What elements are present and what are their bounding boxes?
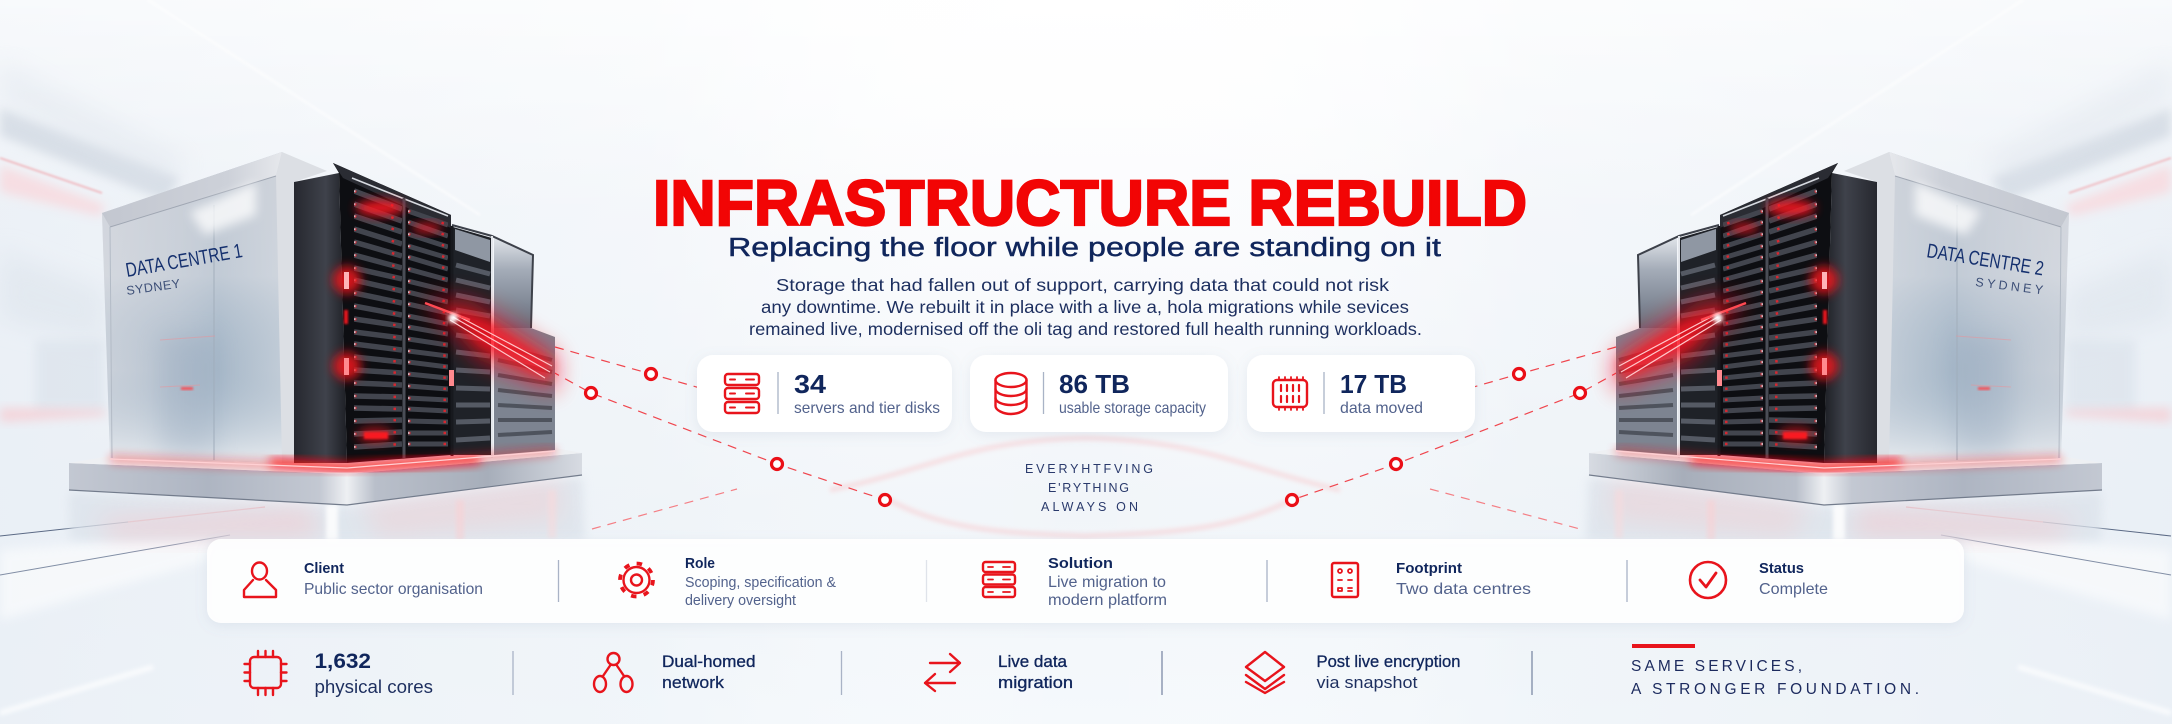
subtitle: Replacing the floor while people are standing on it <box>728 234 1441 262</box>
stat card: data moved: data moved <box>1340 400 1423 417</box>
bottom row: encryption: Post live encryption <box>1316 653 1460 671</box>
data centre 1 label: SYDNEY <box>125 277 182 298</box>
stat card: data moved <box>1247 355 1475 432</box>
everything always on tagline: E'RYTHING <box>1048 481 1129 495</box>
bottom row: encryption <box>1246 652 1460 693</box>
stat card: storage: usable storage capacity <box>1059 400 1206 417</box>
icon: processor <box>244 651 286 695</box>
icon: transfer arrows <box>925 654 960 691</box>
icon: check <box>1690 562 1726 598</box>
central glow arcs <box>830 438 1340 536</box>
bottom row: physical cores: 1,632 <box>314 650 371 673</box>
role: Scoping, specification & <box>685 575 836 591</box>
stat card: servers: servers and tier disks <box>794 400 940 417</box>
role <box>620 555 836 609</box>
stat card: servers: 34 <box>794 369 827 399</box>
bottom row: live migration <box>925 652 1073 692</box>
footprint: Two data centres <box>1396 581 1531 598</box>
bottom row: network <box>594 652 756 692</box>
everything always on tagline <box>1025 462 1153 514</box>
title: INFRASTRUCTURE REBUILD <box>653 167 1527 239</box>
bottom row: live migration: migration <box>998 673 1073 692</box>
stat card: servers <box>697 355 952 432</box>
solution: modern platform <box>1048 592 1167 609</box>
bottom row: physical cores: physical cores <box>314 676 433 697</box>
bottom row: encryption: via snapshot <box>1316 673 1418 692</box>
left dashed connection lines <box>453 317 885 529</box>
footprint: Footprint <box>1396 560 1462 577</box>
data centre 2 label: SYDNEY <box>1975 275 2044 297</box>
icon: person <box>244 562 276 597</box>
closing statement: A STRONGER FOUNDATION. <box>1631 681 1919 698</box>
icon: floor plan <box>1332 563 1358 597</box>
bottom row: physical cores <box>244 650 433 697</box>
icon: layers <box>1246 652 1284 693</box>
closing statement: SAME SERVICES, <box>1631 658 1802 675</box>
client: Client <box>304 560 344 577</box>
data centre 2 illustration <box>1586 152 2102 541</box>
right dashed connection lines <box>1292 317 1718 529</box>
client <box>244 560 483 598</box>
icon: server stack <box>725 374 759 413</box>
footprint <box>1332 560 1531 598</box>
data centre 2 label: DATA CENTRE 2 <box>1925 240 2045 280</box>
solution <box>983 555 1167 609</box>
bottom row: network: Dual-homed <box>662 652 756 671</box>
everything always on tagline: ALWAYS ON <box>1041 500 1138 514</box>
icon: network nodes <box>594 653 632 692</box>
solution: Live migration to <box>1048 574 1166 591</box>
intro paragraph <box>749 275 1422 339</box>
stat card: storage: 86 TB <box>1059 369 1130 399</box>
icon: servers <box>983 562 1015 597</box>
intro paragraph: Storage that had fallen out of support, carrying data that could not risk <box>776 275 1389 295</box>
role: Role <box>685 555 715 572</box>
data centre 1 label <box>124 240 244 298</box>
status: Status <box>1759 560 1804 577</box>
bottom row: network: network <box>662 673 725 692</box>
data centre 1 label: DATA CENTRE 1 <box>124 240 244 282</box>
stat card: data moved: 17 TB <box>1340 369 1407 399</box>
solution: Solution <box>1048 555 1113 572</box>
bottom row: live migration: Live data <box>998 652 1068 671</box>
everything always on tagline: EVERYHTFVING <box>1025 462 1153 476</box>
intro paragraph: any downtime. We rebuilt it in place with a live a, hola migrations while sevices <box>761 297 1409 317</box>
icon: gear <box>620 564 653 596</box>
closing statement <box>1631 644 1919 698</box>
left ambient light rays <box>0 0 480 713</box>
data centre 2 label <box>1925 240 2045 297</box>
intro paragraph: remained live, modernised off the oli tag and restored full health running workloads. <box>749 319 1422 339</box>
status <box>1690 560 1828 598</box>
icon: database <box>996 373 1026 414</box>
icon: memory chip <box>1273 377 1307 410</box>
stat card: storage <box>970 355 1228 432</box>
client: Public sector organisation <box>304 581 483 598</box>
data centre 1 illustration <box>69 152 585 541</box>
info panel <box>207 539 1964 623</box>
role: delivery oversight <box>685 593 796 609</box>
connection nodes <box>586 368 1586 506</box>
status: Complete <box>1759 581 1828 598</box>
right ambient light rays <box>1691 0 2171 713</box>
